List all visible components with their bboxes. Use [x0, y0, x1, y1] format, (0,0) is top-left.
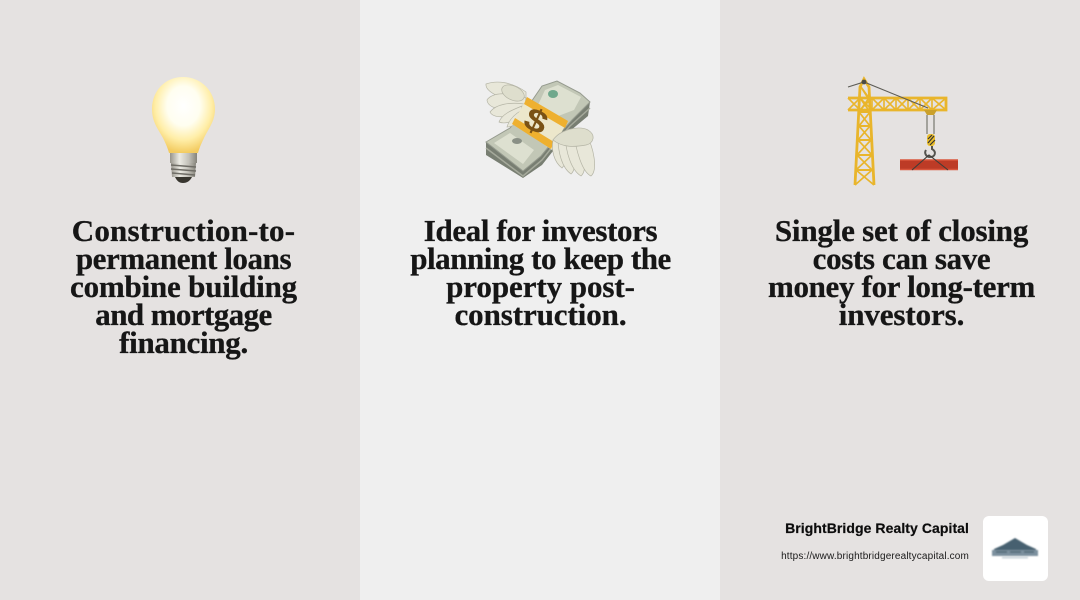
panel: right, closing costs — [720, 0, 1080, 600]
heading: left: combine building — [70, 269, 297, 304]
heading: right: Single set of closing — [775, 213, 1028, 248]
icon: construction crane — [848, 76, 958, 186]
heading: centre — [410, 213, 671, 332]
heading: right — [768, 213, 1035, 332]
heading: centre: construction. — [454, 297, 627, 332]
icon detail: dollar sign: $ — [518, 100, 554, 142]
website url: https://www.brightbridgerealtycapital.com — [781, 551, 969, 562]
heading: centre: property post- — [446, 269, 635, 304]
logo card — [983, 516, 1048, 581]
brand name: BrightBridge Realty Capital — [785, 520, 969, 536]
icon: money with wings — [485, 80, 595, 178]
panel: centre, ideal for investors — [360, 0, 720, 600]
icon: logo house — [991, 537, 1039, 559]
heading: left — [70, 213, 297, 360]
heading: left: permanent loans — [76, 241, 291, 276]
heading: left: financing. — [119, 325, 248, 360]
heading: right: money for long-term — [768, 269, 1035, 304]
heading: left: and mortgage — [95, 297, 272, 332]
panel: left, building and mortgage financing — [0, 0, 360, 600]
heading: right: costs can save — [813, 241, 990, 276]
icon: light bulb — [152, 77, 215, 183]
heading: centre: planning to keep the — [410, 241, 671, 276]
heading: right: investors. — [839, 297, 964, 332]
heading: centre: Ideal for investors — [424, 213, 657, 248]
heading: left: Construction-to- — [72, 213, 295, 248]
